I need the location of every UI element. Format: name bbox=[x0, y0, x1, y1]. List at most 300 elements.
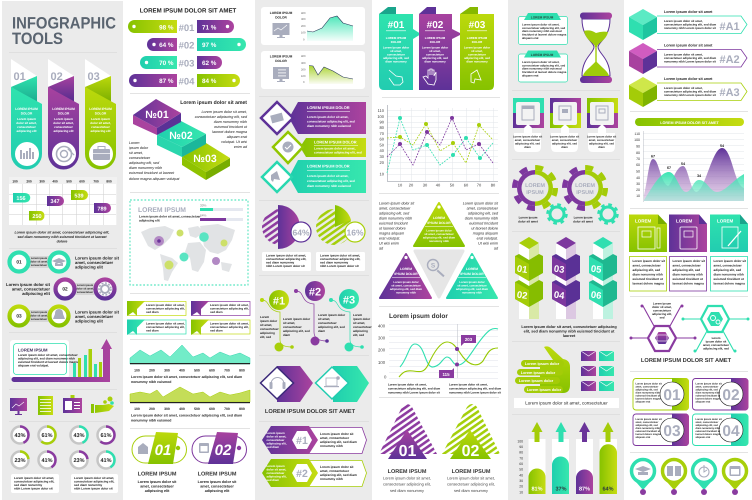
card: teal line chart: DOLOR bbox=[275, 16, 287, 20]
panel #01: Lorem ipsum dolor bbox=[383, 46, 410, 50]
cube row A3: #A3 bbox=[720, 87, 740, 99]
column green: 02 bbox=[516, 290, 528, 302]
note 4: sed diam bbox=[210, 328, 223, 332]
text: triangle right: amet, consectetuer bbox=[467, 206, 499, 210]
hatched arrow 01: consectetuer adipiscing elit, bbox=[383, 482, 431, 486]
hand list: Lorem ipsum dolor bbox=[521, 371, 556, 375]
grid table with value pills: 250 bbox=[32, 214, 42, 220]
text boxes under pies: consectetuer adipiscing elit, bbox=[266, 257, 307, 261]
number card 04: laoreet dolore magna bbox=[696, 433, 721, 436]
envelopes bbox=[581, 351, 614, 391]
area chart green: 700 bbox=[224, 407, 230, 411]
banner 03: Lorem ipsum bbox=[91, 117, 110, 121]
purple and teal area chart: 70 bbox=[636, 157, 640, 161]
text boxes under document cards: diam nonummy nibh bbox=[672, 272, 703, 276]
ring row 2: Lorem ipsum dolor sit bbox=[6, 282, 51, 287]
small teal gears bbox=[548, 204, 618, 224]
text: triangle left: ad bbox=[379, 246, 384, 250]
banner 01: LOREM IPSUM bbox=[15, 107, 38, 111]
area chart teal: 300 bbox=[164, 368, 170, 372]
cube row A1: Lorem ipsum dolor sit amet bbox=[664, 10, 713, 14]
note 4: consectetuer adipiscing elit, bbox=[210, 325, 249, 329]
area chart green: 600 bbox=[209, 407, 215, 411]
panel #03: Lorem ipsum dolor bbox=[464, 46, 491, 50]
cube row A1: #A1 bbox=[720, 21, 740, 33]
tile 3 bbox=[587, 98, 618, 152]
banner 02 bbox=[48, 59, 79, 170]
dashed line chart: 100 bbox=[377, 114, 385, 119]
banner 03: LOREM IPSUM bbox=[89, 107, 112, 111]
panel: world map: Lorem ipsum dolor sit amet, consectetuer bbox=[139, 214, 201, 218]
numbered nodes: sit amet, bbox=[318, 317, 330, 321]
dashed line chart: 50 bbox=[450, 182, 455, 188]
pill row 01: #01 bbox=[179, 23, 195, 34]
panel #01: DOLOR bbox=[391, 40, 402, 44]
cube row A3: Lorem ipsum dolor sit amet, bbox=[664, 86, 703, 90]
text under curve chart bbox=[388, 382, 502, 394]
text: isometric heading and right paragraph: Lorem ipsum dolor sit amet, bbox=[202, 110, 247, 114]
arrow panel green: Lorem ipsum dolor sit amet, bbox=[314, 146, 356, 150]
text boxes under pies bbox=[262, 252, 365, 271]
bars with arrows: 87% bbox=[579, 486, 590, 492]
text: isometric heading and right paragraph: aliquam erat bbox=[227, 135, 248, 139]
purple triangle: adipiscing elit, sed diam bbox=[390, 287, 423, 291]
text boxes under donuts bbox=[11, 474, 118, 493]
green triangle: Lorem ipsum dolor bbox=[426, 228, 453, 232]
number card 04: amet, consectetuer bbox=[696, 421, 718, 424]
text under curve chart: Lorem ipsum dolor sit amet, bbox=[449, 382, 488, 386]
text: triangle right: adipiscing elit, sed bbox=[468, 212, 499, 216]
arrow panel purple: consectetuer adipiscing elit, sed bbox=[307, 120, 355, 124]
grid table with value pills: 156 bbox=[16, 196, 26, 202]
note 2: sed diam bbox=[210, 310, 223, 314]
text boxes under donuts: nibh Lorem ipsum dolor sit bbox=[14, 486, 53, 490]
grid table with value pills bbox=[9, 177, 117, 225]
hex network bbox=[630, 302, 750, 352]
gear 1: LOREM bbox=[525, 183, 545, 189]
text: triangle right bbox=[463, 202, 499, 250]
hatched arrow 02: consectetuer adipiscing elit, bbox=[447, 482, 495, 486]
growth chart callout: LOREM IPSUM bbox=[18, 348, 48, 352]
title: INFOGRAPHIC bbox=[12, 14, 116, 32]
panel #01: consectetuer bbox=[387, 52, 406, 56]
banner 01: 01 bbox=[14, 71, 26, 83]
ring row 2: adipiscing elit bbox=[22, 291, 51, 296]
donut charts bbox=[12, 426, 114, 468]
grid table with value pills: 789 bbox=[97, 206, 107, 212]
note 4 bbox=[191, 320, 250, 335]
purple and teal area chart: 60 bbox=[636, 163, 640, 167]
badge 01: 01 bbox=[155, 442, 171, 459]
note box 1: Lorem ipsum dolor sit amet, bbox=[522, 22, 560, 26]
tile 1: amet, consectetuer bbox=[515, 138, 541, 142]
hand list: Lorem ipsum dolor bbox=[519, 379, 554, 383]
text boxes under document cards: euismod tincidunt ut bbox=[672, 277, 703, 281]
ring row 1: Lorem ipsum dolor sit bbox=[75, 256, 120, 260]
dashed line chart: 80 bbox=[491, 182, 496, 188]
column purple: 04 bbox=[553, 290, 566, 302]
hex row #1: sed diam bbox=[266, 445, 279, 449]
node 3: #3 bbox=[343, 294, 355, 306]
panel #02: diam nonummy bbox=[424, 60, 446, 64]
panel: world map bbox=[130, 200, 248, 285]
number card 02: aliquam erat bbox=[696, 400, 710, 404]
hex row #2: dolor sit amet, bbox=[266, 468, 286, 472]
column purple: 03 bbox=[553, 264, 565, 276]
hex row #2 bbox=[262, 459, 366, 487]
tile 1: diam bbox=[524, 145, 531, 149]
hatched arrow 01: LOREM IPSUM bbox=[388, 469, 427, 475]
green triangle: nonummy nibh bbox=[429, 239, 449, 243]
gear captions: dolor sit amet bbox=[518, 220, 538, 224]
card: teal line chart bbox=[261, 7, 365, 45]
hex text blocks: adipiscing elit, sed bbox=[703, 346, 729, 350]
cube list bbox=[629, 9, 747, 107]
grid table with value pills: 600 bbox=[79, 180, 85, 184]
note 3 bbox=[127, 320, 186, 335]
dashed line chart: 30 bbox=[423, 182, 428, 188]
text boxes under document cards: amet, consectetuer bbox=[672, 264, 701, 268]
text boxes under donuts: sed diam nonummy bbox=[74, 483, 103, 487]
donut charts: 41% bbox=[100, 458, 112, 464]
card: green line chart: 400 bbox=[301, 55, 306, 58]
text: triangle left: Lorem ipsum dolor sit bbox=[379, 202, 415, 206]
number card 03: amet, consectetuer bbox=[636, 421, 658, 424]
numbered nodes: elit, sed bbox=[353, 333, 364, 337]
tile 3: diam bbox=[598, 145, 605, 149]
panel #03: adipiscing elit, sed bbox=[464, 56, 490, 60]
number card 04: adipiscing elit, sed bbox=[696, 424, 718, 427]
dashed line chart: 30 bbox=[380, 154, 385, 159]
hex row #1: dolor sit amet, bbox=[266, 434, 286, 438]
text boxes under pies: consectetuer adipiscing elit, bbox=[320, 257, 361, 261]
text boxes under donuts: consectetuer adipiscing elit, bbox=[14, 480, 55, 484]
pill row 01 bbox=[128, 20, 234, 34]
text boxes under pies: sed diam nonummy bbox=[320, 260, 349, 264]
green triangle: adipiscing elit, sed diam bbox=[423, 236, 456, 240]
text: triangle left: euismod tincidunt bbox=[379, 222, 409, 226]
number card 01: laoreet dolore magna bbox=[636, 398, 661, 400]
node 2: #2 bbox=[309, 286, 321, 298]
green heading pill: LOREM IPSUM DOLOR SIT AMET bbox=[660, 121, 719, 125]
bars with arrows: 80 bbox=[519, 451, 523, 455]
cube row A1 bbox=[629, 9, 747, 40]
heading: hex network: LOREM IPSUM DOLOR SIT AMET bbox=[641, 358, 732, 364]
area chart teal bbox=[130, 345, 250, 384]
ring row 3: dolor sit amet, bbox=[30, 314, 48, 318]
cube row A2: consectetuer adipiscing elit, sed diam bbox=[664, 56, 717, 60]
panel: world map: 64% bbox=[200, 214, 207, 218]
panel #02 bbox=[419, 7, 462, 90]
hex row #2: consectetuer bbox=[266, 471, 285, 475]
area chart teal: 400 bbox=[179, 368, 185, 372]
pill row 04: #04 bbox=[179, 76, 195, 88]
panel #01: diam nonummy bbox=[385, 60, 407, 64]
hatched arrow 02 bbox=[442, 404, 500, 493]
card: teal line chart: 0 bbox=[303, 38, 305, 42]
card: teal line chart: 400 bbox=[301, 12, 306, 15]
area chart green: 500 bbox=[194, 407, 200, 411]
note 4: Lorem ipsum dolor sit amet, bbox=[210, 322, 249, 326]
numbered nodes: Lorem bbox=[260, 315, 270, 319]
dashed line chart: 110 bbox=[378, 108, 385, 113]
white caption bar bbox=[514, 398, 619, 408]
badge 02: amet, consectetuer bbox=[200, 484, 234, 488]
panel #02: Lorem ipsum dolor bbox=[422, 46, 449, 50]
ring row 2: amet, consectetuer bbox=[12, 286, 50, 292]
hatched arrow 02: 02 bbox=[462, 443, 480, 460]
note box 2: LOREM IPSUM bbox=[531, 53, 554, 57]
column teal bbox=[589, 237, 617, 319]
arrow panel teal: consectetuer adipiscing elit, sed bbox=[307, 179, 355, 183]
banner 01: consectetuer bbox=[17, 125, 37, 129]
area chart green: 100 bbox=[134, 407, 140, 411]
text boxes under document cards: Lorem ipsum dolor sit bbox=[632, 259, 665, 263]
hex text blocks bbox=[652, 302, 730, 350]
text boxes under document cards: adipiscing elit, sed bbox=[632, 268, 660, 272]
arrow panel teal: LOREM IPSUM DOLOR bbox=[307, 164, 350, 168]
icon: document bbox=[38, 396, 53, 415]
purple and teal area chart: 90 bbox=[636, 144, 640, 148]
badge 01: LOREM IPSUM bbox=[138, 472, 177, 478]
gear captions bbox=[518, 216, 593, 224]
numbered nodes bbox=[260, 281, 373, 352]
text boxes under document cards: Lorem ipsum dolor sit bbox=[672, 259, 705, 263]
note box 2: diam nonummy nibh euismod bbox=[522, 66, 562, 70]
panel #02: adipiscing elit, sed bbox=[422, 56, 448, 60]
arrow panel green: LOREM IPSUM DOLOR bbox=[314, 140, 357, 144]
hex text blocks: consectetuer bbox=[653, 308, 672, 312]
note 2: Lorem ipsum dolor sit amet, bbox=[210, 303, 249, 307]
banner 03: adipiscing elit bbox=[90, 129, 111, 133]
donut charts: 61% bbox=[41, 433, 53, 439]
teal hexagon node bbox=[682, 306, 750, 352]
column green: 01 bbox=[516, 264, 529, 276]
ring row 1: 01 bbox=[16, 260, 22, 266]
pin calendar bbox=[724, 460, 746, 495]
banner 01: dolor sit amet, bbox=[16, 121, 37, 125]
note 1 bbox=[127, 301, 186, 316]
ring row 1: adipiscing elit bbox=[75, 264, 104, 270]
hatched arrow 02: sed diam nonummy bbox=[454, 488, 488, 493]
number card 01: amet, consectetuer bbox=[636, 386, 658, 388]
cube row A1: Lorem ipsum dolor sit amet, bbox=[664, 19, 703, 23]
ring row 1: amet, consectetuer bbox=[75, 260, 114, 265]
text: isometric heading and right paragraph: volutpat. Ut wisi bbox=[221, 140, 247, 144]
bars with arrows: 37% bbox=[555, 486, 567, 492]
curve chart: 300 bbox=[378, 336, 386, 340]
panel #02: consectetuer bbox=[426, 52, 445, 56]
hand list: Lorem ipsum dolor bbox=[527, 388, 562, 392]
text boxes under pies: nibh Lorem ipsum dolor sit bbox=[320, 264, 359, 268]
area chart green: 800 bbox=[239, 407, 245, 411]
donut charts: 43% bbox=[73, 433, 85, 439]
hatched arrow 02: Lorem ipsum dolor sit amet, bbox=[447, 476, 495, 480]
hex text blocks: amet, consectetuer bbox=[703, 343, 730, 347]
text: triangle left: diam nonummy nibh bbox=[379, 216, 412, 220]
pin icons bbox=[632, 460, 746, 495]
ring row 3: Lorem ipsum dolor sit bbox=[75, 310, 120, 314]
hatched arrow 01: sed diam nonummy bbox=[390, 488, 424, 493]
donut charts: 41% bbox=[41, 458, 53, 464]
number card 03: laoreet dolore magna bbox=[636, 433, 661, 436]
purple and teal area chart: 110 bbox=[634, 132, 640, 136]
badge 01: adipiscing elit bbox=[145, 489, 170, 493]
card: green line chart: 200 bbox=[301, 68, 306, 72]
gear 2: LOREM bbox=[575, 183, 595, 189]
column caption bbox=[521, 325, 617, 338]
hexagon diamonds bbox=[260, 366, 369, 402]
panel #03: consectetuer bbox=[468, 52, 487, 56]
hex row #2: adipiscing elit, sed diam bbox=[320, 473, 357, 477]
purple and teal area chart: 40 bbox=[636, 176, 640, 180]
text: left paragraph: consectetuer bbox=[129, 156, 151, 160]
pill row 03: 70 % bbox=[159, 60, 174, 67]
hatched arrow 01 bbox=[379, 404, 437, 493]
note 3: consectetuer adipiscing elit, bbox=[146, 325, 185, 329]
panel #03: sit amet, bbox=[471, 49, 483, 53]
teal triangle: adipiscing elit, sed diam bbox=[456, 287, 489, 291]
teal hex with laptop bbox=[316, 366, 369, 402]
text under curve chart: Lorem ipsum dolor sit amet, bbox=[388, 382, 427, 386]
panel: three ribbon banners bbox=[11, 59, 116, 170]
note 3: sed diam bbox=[146, 328, 159, 332]
cube row A2 bbox=[629, 43, 747, 74]
ring row 3: adipiscing elit bbox=[75, 318, 104, 324]
growth chart callout bbox=[10, 339, 112, 382]
bars with arrows: 40 bbox=[519, 473, 523, 477]
area chart green: nonummy nibh euismod bbox=[131, 418, 171, 422]
hex row #1: Lorem ipsum dolor sit bbox=[320, 432, 354, 436]
grid table with value pills: 539 bbox=[74, 194, 84, 200]
icon row bbox=[10, 395, 114, 415]
hex row #1: adipiscing elit, sed diam bbox=[320, 440, 357, 444]
pin graduation bbox=[632, 460, 654, 495]
purple triangle: nonummy nibh bbox=[396, 290, 416, 294]
note 1: Lorem ipsum dolor sit amet, bbox=[146, 303, 185, 307]
arrow panel teal: diam nonummy nibh euismod bbox=[307, 184, 351, 188]
column caption: elit, sed diam nonummy nibh euismod tincidunt ut bbox=[524, 330, 615, 334]
curve chart: 115 bbox=[442, 372, 450, 377]
area chart teal: nonummy nibh euismod bbox=[131, 380, 171, 384]
numbered nodes: sit amet, bbox=[283, 321, 295, 325]
growth chart callout: aliquam erat volutpat. bbox=[18, 364, 49, 368]
hex text blocks: sed bbox=[660, 316, 665, 320]
pill row 02: #02 bbox=[179, 40, 194, 52]
gear captions: dolor sit amet bbox=[573, 220, 593, 224]
step 02: №02 bbox=[169, 130, 193, 142]
dashed line chart: 10 bbox=[380, 172, 385, 176]
number card 02: laoreet dolore magna bbox=[696, 398, 721, 400]
numbered nodes: consectetuer bbox=[283, 325, 303, 329]
pie charts bbox=[262, 205, 365, 249]
note box 2: Lorem ipsum dolor sit amet, bbox=[522, 60, 560, 64]
dashed line chart: 40 bbox=[380, 148, 385, 153]
ring row 2: Lorem ipsum bbox=[77, 284, 94, 287]
bars with arrows: 90 bbox=[519, 445, 523, 449]
heading: percent pills: LOREM IPSUM DOLOR SIT AMET bbox=[140, 8, 237, 14]
text boxes under document cards: euismod tincidunt ut bbox=[632, 277, 663, 281]
teal triangle: nonummy nibh bbox=[462, 290, 482, 294]
banner 02: dolor sit amet, bbox=[53, 121, 74, 125]
note 2 bbox=[191, 301, 250, 316]
number card 03: Lorem ipsum dolor sit bbox=[636, 418, 662, 421]
column green bbox=[515, 237, 543, 319]
banner 01: adipiscing elit bbox=[16, 129, 37, 133]
text: left paragraph: diam nonummy nibh bbox=[129, 166, 162, 170]
text: left paragraph: ipsum dolor bbox=[129, 146, 149, 150]
grid table with value pills: 800 bbox=[106, 180, 112, 184]
text boxes under document cards: laoreet dolore magna bbox=[672, 282, 704, 286]
tile 2: adipiscing elit, sed bbox=[552, 142, 577, 146]
ring row 1: dolor sit amet, bbox=[30, 260, 48, 264]
text: triangle right: erat volutpat. bbox=[477, 236, 498, 240]
text: isometric heading and right paragraph: laoreet dolore magna bbox=[212, 130, 247, 134]
ring row 3 bbox=[10, 306, 120, 326]
text under curve chart: consectetuer adipiscing elit, sed diam bbox=[449, 386, 502, 390]
column caption: laoreet bbox=[563, 334, 576, 338]
area chart green bbox=[130, 387, 250, 422]
panel #01: LOREM IPSUM bbox=[386, 36, 407, 40]
white caption bar: Lorem ipsum dolor sit amet, consectetuer bbox=[525, 400, 608, 406]
text boxes under document cards: euismod tincidunt ut bbox=[714, 277, 744, 281]
purple and teal area chart: 67 bbox=[667, 166, 671, 170]
gear captions: Lorem ipsum bbox=[574, 216, 593, 220]
curve chart: 400 bbox=[378, 324, 386, 328]
gray inverted triangle: S bbox=[431, 262, 436, 270]
number card 01: aliquam erat bbox=[636, 400, 650, 404]
pill row 01: 98 % bbox=[159, 24, 174, 32]
badge 02: Lorem ipsum dolor sit bbox=[198, 480, 237, 484]
bars with arrows: 50 bbox=[519, 468, 523, 472]
numbered nodes: consectetuer bbox=[353, 325, 373, 329]
pill row 04: 87 % bbox=[159, 78, 174, 85]
panel #03: LOREM IPSUM bbox=[467, 36, 488, 40]
document card teal: LOREM bbox=[717, 218, 734, 224]
text boxes under document cards: amet, consectetuer bbox=[632, 264, 661, 268]
teal triangle: Lorem ipsum dolor bbox=[459, 280, 486, 284]
dashed line chart: 60 bbox=[380, 136, 385, 142]
note 2: consectetuer adipiscing elit, bbox=[210, 306, 249, 310]
pie 64%: 64% bbox=[292, 228, 310, 238]
bars with arrows: 20 bbox=[519, 485, 523, 489]
text: left paragraph: sit amet, bbox=[129, 151, 143, 155]
hex row #2: Lorem ipsum dolor sit bbox=[320, 465, 354, 469]
tile 2: amet, consectetuer bbox=[552, 138, 578, 142]
text under curve chart: consectetuer adipiscing elit, sed diam bbox=[388, 386, 441, 390]
badge 02: LOREM IPSUM bbox=[198, 472, 237, 478]
banner 03: dolor sit amet, bbox=[90, 121, 111, 125]
ring row 2: dolor sit amet, bbox=[76, 288, 94, 290]
pin book bbox=[662, 460, 686, 495]
text boxes under pies: Lorem ipsum dolor sit amet, bbox=[320, 254, 360, 258]
arrow panel teal bbox=[262, 160, 366, 193]
number card 02: adipiscing elit, sed bbox=[696, 388, 718, 392]
teal triangle: sit amet, consectetuer bbox=[457, 284, 488, 288]
curve chart: 100 bbox=[378, 360, 386, 365]
arrow panels #01 #02 #03 bbox=[379, 7, 494, 90]
number card 01: adipiscing elit, sed bbox=[636, 388, 658, 392]
banner 03: 03 bbox=[88, 71, 100, 83]
cube row A2: #A2 bbox=[720, 54, 740, 66]
gear 2: IPSUM bbox=[576, 190, 594, 196]
donut charts: 43% bbox=[14, 433, 26, 439]
tile 3: adipiscing elit, sed bbox=[589, 142, 614, 146]
banner 02: Lorem ipsum bbox=[54, 117, 73, 121]
banner 02: 02 bbox=[50, 71, 63, 83]
hex row #1: adipiscing elit, bbox=[266, 442, 287, 446]
text boxes under donuts: Lorem ipsum dolor sit amet, bbox=[14, 476, 54, 480]
